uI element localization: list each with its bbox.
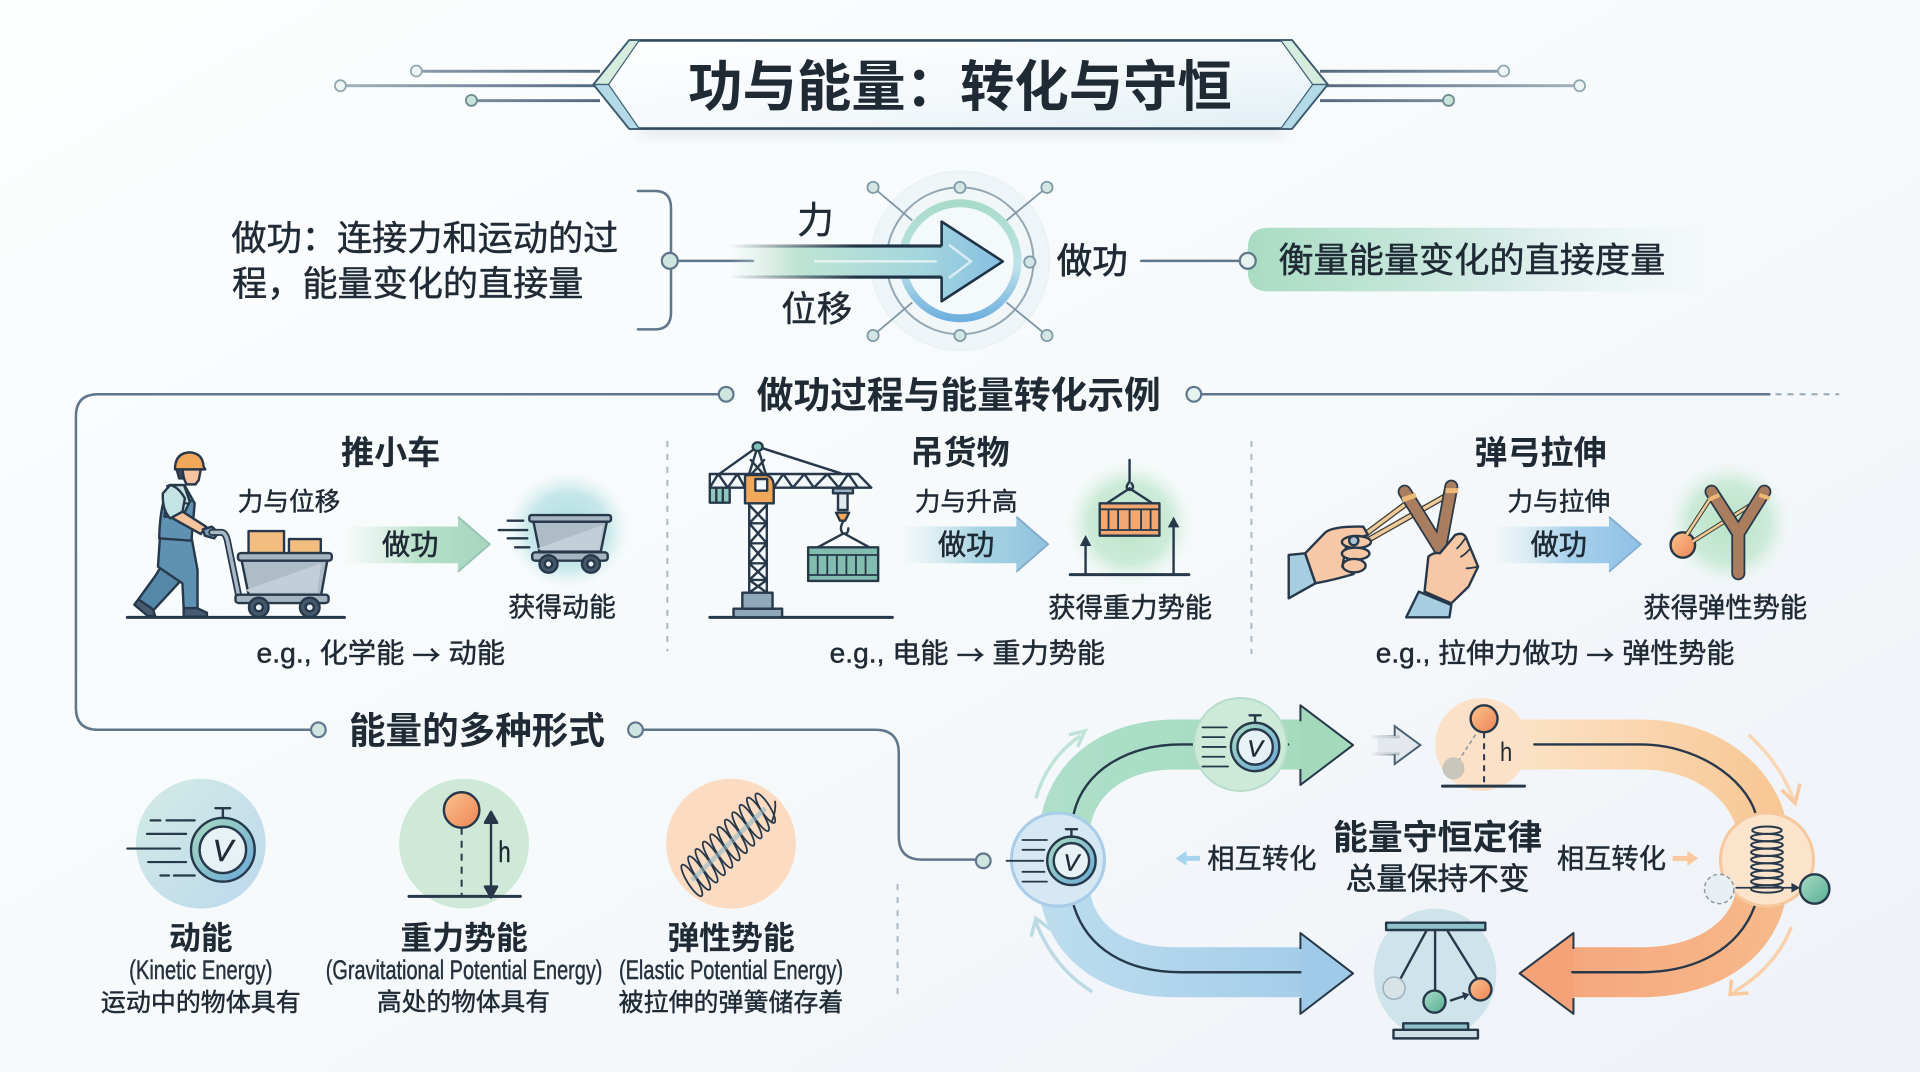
- node: kinetic blue: [1007, 813, 1104, 906]
- divider: [1250, 441, 1252, 654]
- icon: hands stretching slingshot: [1289, 487, 1478, 617]
- label: displacement: 位移: [781, 289, 852, 329]
- node: elastic spring: [1704, 813, 1829, 906]
- card: kinetic energy: [101, 779, 301, 1017]
- english name: (Kinetic Energy): [129, 955, 272, 985]
- banner connector lines right: [1320, 66, 1585, 106]
- label: force: 力: [797, 200, 834, 241]
- label: doing work: 做功: [1057, 241, 1128, 281]
- description: 高处的物体具有: [377, 989, 550, 1017]
- icon: stopwatch with speed lines: [127, 779, 266, 909]
- arrow: doing work: 做功: [1531, 530, 1587, 561]
- thin cycle arrows: [1031, 731, 1800, 994]
- panel: stretching slingshot: [1289, 435, 1807, 673]
- node: kinetic green: V: [1247, 735, 1265, 761]
- arrow: doing work: 做功: [382, 530, 438, 561]
- title banner: 功与能量：转化与守恒: [688, 56, 1232, 118]
- arrow: orange bottom right: [1520, 896, 1761, 1014]
- divider: [897, 884, 899, 999]
- arrow: doing work: [1496, 517, 1641, 572]
- left mutual conversion label: 相互转化: [1207, 843, 1316, 874]
- center subtitle: 总量保持不变: [1346, 862, 1529, 896]
- node: kinetic green: [1194, 698, 1287, 791]
- arrow: blue bottom left: [1065, 896, 1353, 1014]
- icon: raised container: [1066, 460, 1193, 585]
- arrow: doing work: 做功: [938, 530, 994, 561]
- connector to conservation loop: [644, 730, 991, 868]
- icon: moving cart: [499, 472, 629, 588]
- node: pendulum: [1374, 909, 1496, 1038]
- section heading: work examples: [719, 375, 1839, 416]
- main arrow: [729, 222, 1003, 301]
- description: 运动中的物体具有: [101, 989, 301, 1017]
- heading: 吊货物: [910, 435, 1010, 472]
- example note: e.g., 拉伸力做功 → 弹性势能: [1376, 633, 1734, 673]
- heading: 弹弓拉伸: [1474, 435, 1607, 472]
- icon: worker pushing cart: [127, 452, 344, 617]
- arrow: green top left: [1065, 705, 1353, 823]
- english name: (Gravitational Potential Energy): [326, 955, 602, 985]
- card: gravitational potential energy: [326, 779, 602, 1017]
- title banner: [335, 40, 1585, 137]
- arrow: orange top right: [1512, 744, 1761, 823]
- icon: raised ball with height: [399, 779, 529, 909]
- banner connector lines left: [335, 66, 600, 106]
- energy change measure pill: [1240, 228, 1702, 291]
- example note: e.g., 化学能 → 动能: [257, 633, 505, 673]
- panel: pushing cart: [127, 435, 629, 673]
- arrow: doing work: [904, 517, 1048, 572]
- label: force and height: 力与升高: [915, 487, 1018, 516]
- icon: stopwatch with speed lines: V: [213, 834, 236, 868]
- right mutual conversion label: 相互转化: [1557, 843, 1666, 874]
- node: potential orange: h: [1500, 737, 1512, 767]
- arrow: doing work: [345, 517, 490, 572]
- divider: [666, 441, 668, 651]
- label: force and stretch: 力与拉伸: [1507, 487, 1610, 516]
- english name: (Elastic Potential Energy): [619, 955, 843, 985]
- small transition arrow: [1370, 726, 1420, 764]
- work definition text: 程，能量变化的直接量: [232, 265, 583, 304]
- name: 弹性势能: [667, 920, 795, 956]
- energy change measure pill: 衡量能量变化的直接度量: [1278, 242, 1665, 281]
- center title: 能量守恒定律: [1333, 818, 1542, 857]
- label: gains elastic potential energy: 获得弹性势能: [1643, 592, 1807, 623]
- panel: lifting cargo: [710, 435, 1212, 673]
- example note: e.g., 电能 → 重力势能: [830, 633, 1105, 673]
- work definition text: 做功：连接力和运动的过: [231, 220, 618, 259]
- description: 被拉伸的弹簧储存着: [619, 989, 843, 1017]
- section frame line: [76, 394, 719, 730]
- icon: compressed spring: [666, 779, 796, 909]
- name: 动能: [169, 920, 233, 956]
- icon: raised ball with height: h: [498, 836, 511, 869]
- bracket connector: [638, 191, 753, 329]
- connector to measure pill: [1141, 260, 1240, 262]
- energy conservation loop: [1007, 698, 1829, 1038]
- label: gains gravitational potential energy: 获得重力势能: [1048, 592, 1212, 623]
- card: elastic potential energy: [619, 779, 843, 1017]
- icon: loaded slingshot: [1668, 462, 1790, 585]
- section heading: work examples: 做功过程与能量转化示例: [757, 375, 1161, 416]
- label: gains kinetic energy: 获得动能: [508, 593, 616, 623]
- section heading: forms of energy: 能量的多种形式: [349, 711, 605, 752]
- work definition text: [231, 220, 618, 304]
- force and displacement work icon: [729, 171, 1053, 350]
- node: potential orange: [1435, 698, 1528, 791]
- icon: tower crane: [710, 442, 892, 617]
- label: force and displacement: 力与位移: [238, 487, 340, 516]
- heading: 推小车: [341, 435, 440, 472]
- name: 重力势能: [400, 920, 528, 956]
- node: kinetic blue: V: [1064, 849, 1082, 875]
